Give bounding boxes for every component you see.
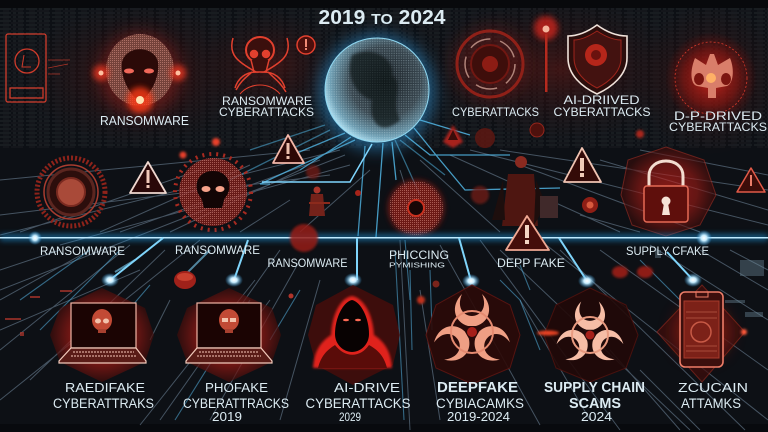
label: card 5: SCAMS bbox=[569, 395, 621, 412]
icon: warning triangle on timeline bbox=[506, 216, 549, 250]
card: hooded figure bbox=[308, 285, 400, 385]
label: card 4: CYBIACAMKS bbox=[436, 396, 524, 411]
icon: shield bbox=[568, 25, 627, 94]
card: laptop 2 bbox=[177, 288, 281, 382]
icon: deep-driven mask bbox=[665, 32, 757, 124]
heading: deep-driven cyberattacks bbox=[669, 109, 767, 134]
heading: deep-driven cyberattacks: CYBERATTACKS bbox=[669, 120, 767, 134]
icon: red blobs on timeline bbox=[174, 224, 653, 304]
timeline labels: RANSOMWARE bbox=[268, 258, 348, 270]
icon: red burst centre bbox=[388, 180, 444, 236]
timeline labels: DEPP FAKE bbox=[497, 258, 565, 270]
heading: ransomware cyberattacks: RANSOMWARE bbox=[222, 94, 312, 108]
heading: ai-driven cyberattacks bbox=[554, 93, 650, 119]
card: biohazard 1 bbox=[426, 285, 520, 384]
icon: hacker group bbox=[471, 156, 598, 226]
heading: deep-driven cyberattacks: D-P-DRIVED bbox=[674, 109, 762, 123]
label: card 2 bbox=[183, 380, 289, 424]
label: card 6: ZCUCAIN bbox=[678, 380, 748, 395]
label: card 1 bbox=[53, 380, 154, 411]
card: smartphone bbox=[657, 285, 747, 382]
label: card 5 bbox=[544, 379, 645, 424]
heading: ai-driven cyberattacks: CYBERATTACKS bbox=[554, 105, 650, 119]
icon: circuit ring bbox=[37, 158, 105, 226]
label: card 2: 2019 bbox=[212, 410, 242, 424]
icon: skull burst bbox=[175, 138, 251, 230]
label: card 3: AI-DRIVE bbox=[334, 380, 400, 395]
heading: ransomware cyberattacks bbox=[219, 94, 314, 119]
label: card 1: CYBERATTRAKS bbox=[53, 396, 154, 411]
icon: warning triangle far right bbox=[737, 168, 765, 192]
heading: ransomware cyberattacks: CYBERATTACKS bbox=[219, 105, 314, 119]
icon: hacker figure left bbox=[306, 165, 361, 216]
label: card 4: DEEPFAKE bbox=[437, 379, 518, 396]
label: card 6 bbox=[678, 380, 748, 411]
icon: warning triangle centre bbox=[273, 135, 304, 163]
label: card 3 bbox=[306, 380, 410, 424]
timeline nodes bbox=[101, 273, 702, 288]
timeline labels: SUPPLY CFAKE bbox=[626, 246, 709, 258]
label: card 3: CYBERATTACKS bbox=[306, 396, 410, 411]
icon: phone outline bbox=[6, 34, 70, 102]
globe rays and circuit paths bbox=[230, 120, 560, 237]
heading: ransomware: RANSOMWARE bbox=[100, 114, 189, 128]
label: card 5: SUPPLY CHAIN bbox=[544, 379, 645, 396]
label: card 3: 2029 bbox=[339, 410, 361, 424]
icon: warning badge bbox=[297, 36, 315, 54]
icon: skull with tentacles bbox=[232, 37, 288, 94]
icon: globe bbox=[319, 34, 435, 150]
label: card 4: 2019-2024 bbox=[447, 410, 510, 424]
heading: cyberattacks: CYBERATTACKS bbox=[452, 105, 539, 119]
icon: padlock bbox=[621, 147, 716, 236]
connector paths bbox=[110, 238, 693, 281]
timeline labels bbox=[40, 245, 709, 270]
label: card 2: PHOFAKE bbox=[205, 380, 268, 395]
timeline labels: RANSOMWARE bbox=[40, 246, 125, 258]
icon: cyber ring bbox=[452, 26, 528, 102]
heading: ai-driven cyberattacks: AI-DRIIVED bbox=[564, 93, 640, 107]
label: card 5: 2024 bbox=[581, 410, 612, 424]
label: card 1: RAEDIFAKE bbox=[65, 380, 145, 395]
timeline labels: PHICCING bbox=[389, 250, 449, 262]
icon: warning triangle right bbox=[564, 148, 601, 182]
timeline bbox=[0, 230, 768, 288]
timeline labels: PYMISHING bbox=[389, 260, 445, 270]
icon: warning triangle left bbox=[130, 162, 166, 193]
icon: small alert badges bbox=[443, 123, 644, 148]
icon: ransomware mask bbox=[93, 32, 186, 116]
label: card 6: ATTAMKS bbox=[681, 396, 741, 411]
timeline labels: RANSOMWARE bbox=[175, 245, 260, 257]
label: card 4 bbox=[436, 379, 524, 424]
card: biohazard 2 bbox=[537, 288, 638, 382]
icon: pin beacon bbox=[534, 16, 558, 92]
label: card 2: CYBERATTRACKS bbox=[183, 396, 289, 411]
card: laptop 1 bbox=[50, 288, 154, 382]
title: 2019 TO 2024 bbox=[318, 7, 446, 29]
